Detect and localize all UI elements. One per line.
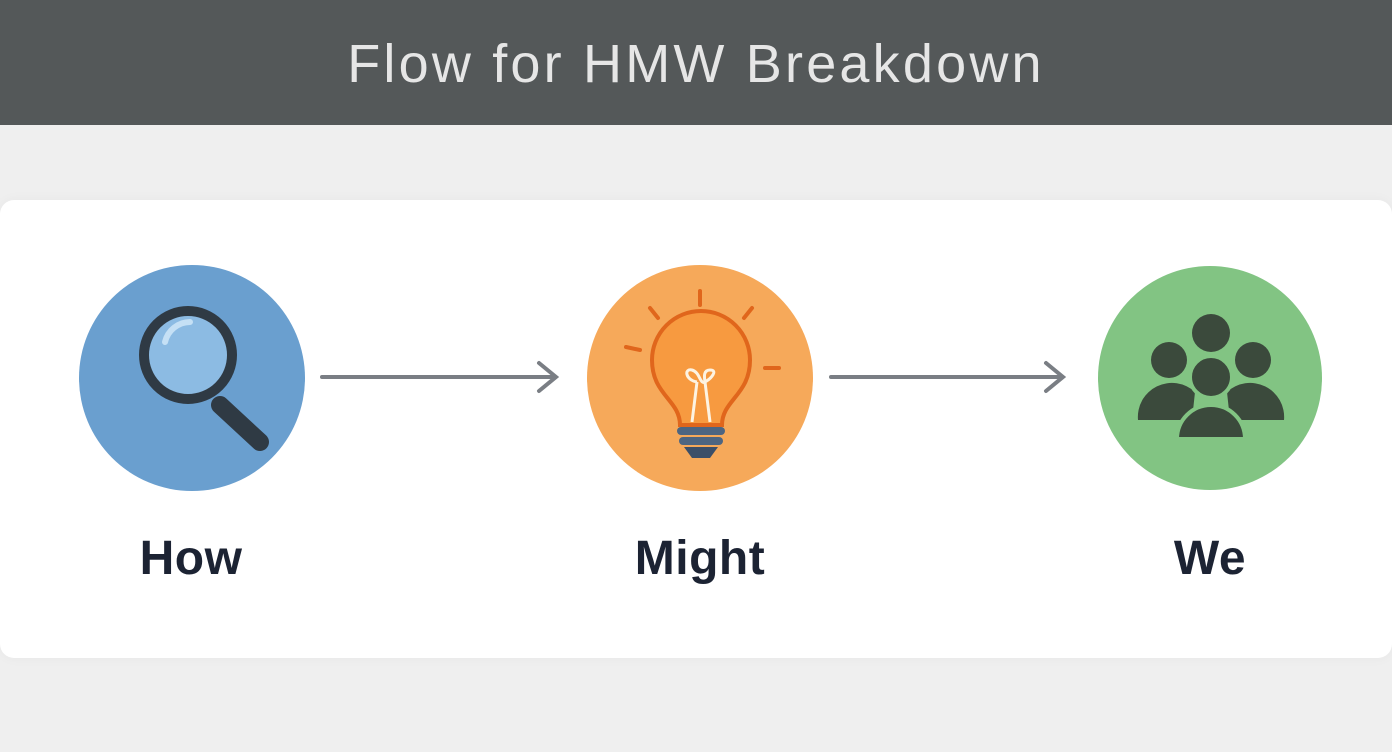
label: How: How [140,532,242,585]
icon: lightbulb circle [587,265,813,491]
title: Flow for HMW Breakdown [347,34,1045,94]
header band [0,0,1392,125]
label: Might: Might [635,532,765,585]
icon: magnifier circle [79,265,305,491]
panel: flow card [0,200,1392,658]
icon: people circle [1098,266,1322,490]
arrow 2 [831,363,1063,391]
arrow 1 [322,363,556,391]
label: We: We [1174,532,1246,585]
